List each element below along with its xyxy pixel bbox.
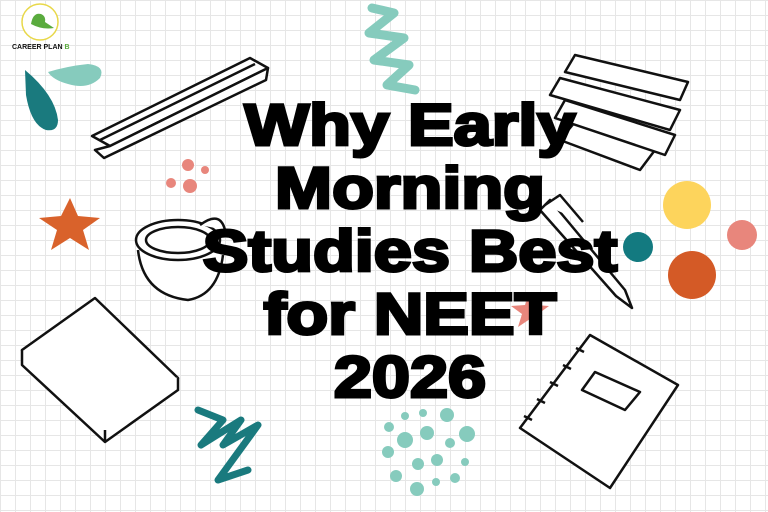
logo: CAREER PLAN B xyxy=(12,44,70,51)
star pink xyxy=(511,292,549,327)
dots teal xyxy=(382,408,475,496)
circles right xyxy=(623,181,757,299)
title: Why Early xyxy=(245,93,575,158)
mug xyxy=(136,219,225,300)
drops xyxy=(25,64,102,130)
title: 2026 xyxy=(334,345,486,410)
book top left xyxy=(92,58,268,158)
zigzag bottom xyxy=(198,410,258,480)
title: Studies Best xyxy=(203,219,617,284)
dots pink xyxy=(166,159,209,193)
pen xyxy=(540,195,632,308)
title: for NEET xyxy=(264,282,556,347)
zigzag top xyxy=(369,8,415,90)
book bottom left xyxy=(22,298,178,442)
title xyxy=(202,93,618,410)
star orange xyxy=(39,198,100,250)
book stack right xyxy=(550,55,688,170)
notebook xyxy=(520,335,678,488)
logo xyxy=(12,4,70,51)
title: Morning xyxy=(275,156,545,221)
